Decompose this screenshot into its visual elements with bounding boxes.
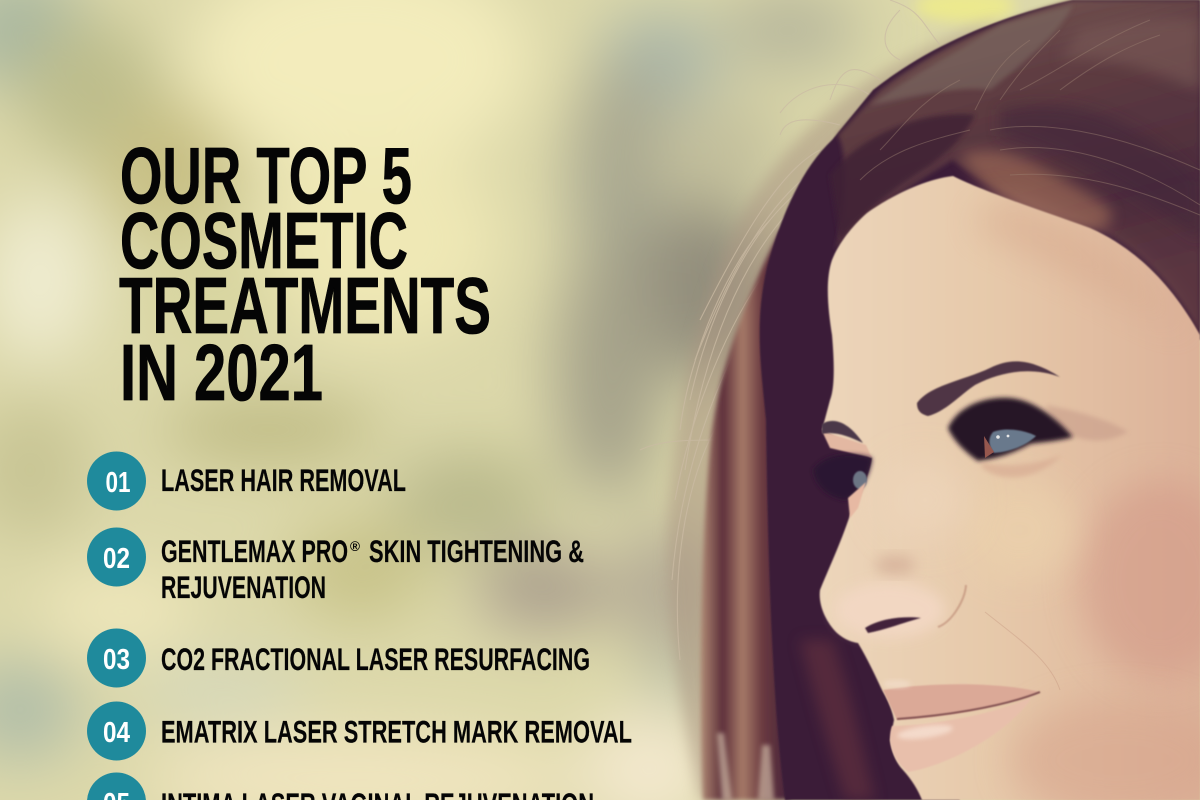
list item 03: CO2 FRACTIONAL LASER RESURFACING — [161, 641, 590, 677]
photo: woman in profile — [640, 0, 1200, 800]
hair: dark main mass — [760, 0, 1200, 800]
list item 02: SKIN TIGHTENING & — [369, 533, 584, 569]
list item 01: LASER HAIR REMOVAL — [161, 462, 406, 498]
title: IN 2021 — [120, 328, 323, 417]
title: OUR TOP 5 — [120, 131, 412, 220]
list item 05 — [87, 772, 594, 800]
hair: wispy outer halo — [640, 0, 1000, 800]
lips — [883, 680, 1040, 772]
hair: crown — [830, 0, 1200, 335]
list item 02: 02 — [103, 543, 130, 575]
title: COSMETIC — [120, 196, 408, 285]
title: TREATMENTS — [119, 261, 491, 350]
list item 03 — [87, 628, 590, 688]
nostril and nose crease — [865, 585, 1060, 690]
list item 02 — [87, 528, 584, 605]
list item 04 — [87, 702, 632, 760]
list item 03: 03 — [103, 644, 130, 676]
list item 01 — [87, 452, 406, 510]
far eye and brow — [813, 421, 872, 518]
list item 04: EMATRIX LASER STRETCH MARK REMOVAL — [161, 714, 632, 750]
near eye and eyebrow — [917, 361, 1128, 477]
list item 04: 04 — [103, 717, 130, 749]
hair: side lock — [701, 230, 800, 800]
list item 02: GENTLEMAX PRO — [161, 533, 348, 569]
title — [119, 131, 491, 417]
list item 01: 01 — [106, 467, 130, 499]
list item 02: ® — [350, 538, 361, 554]
list item 02: REJUVENATION — [161, 569, 326, 605]
face: skin — [820, 176, 1200, 800]
